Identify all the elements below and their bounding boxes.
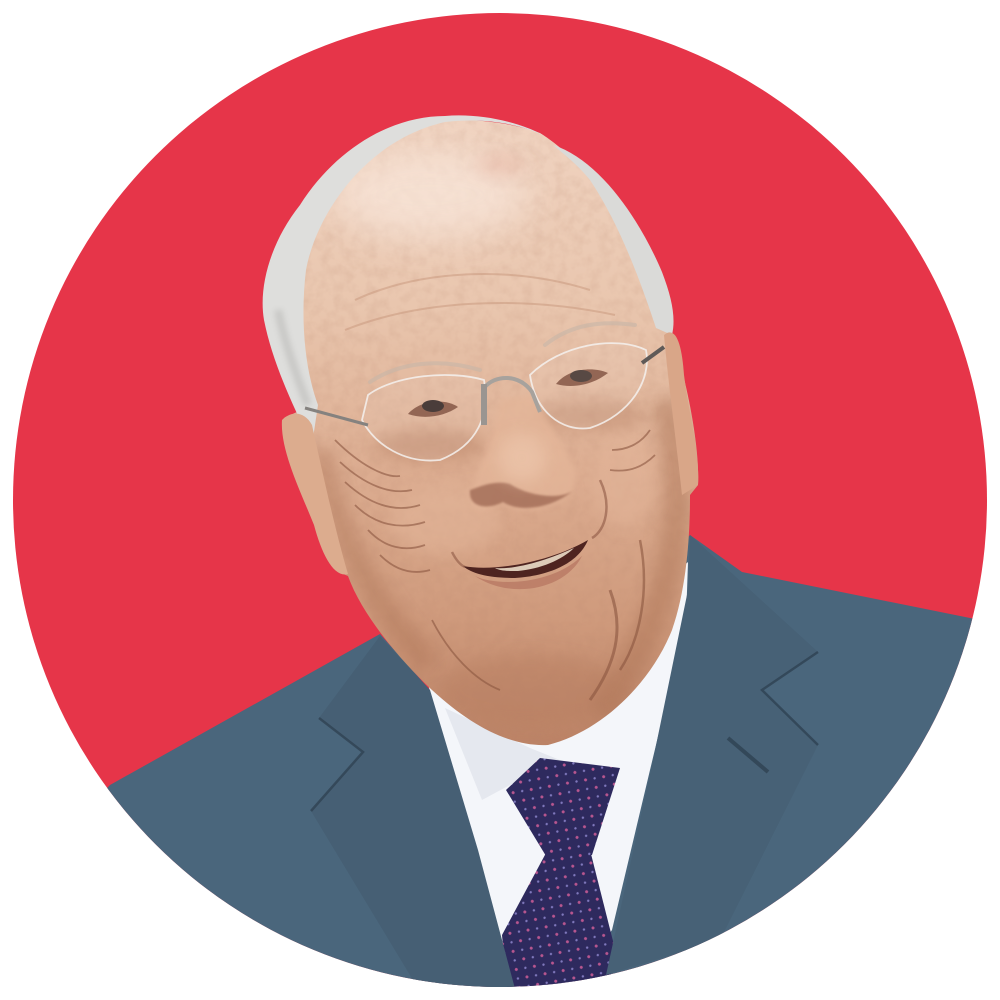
hair shading bbox=[278, 310, 308, 405]
tie knot bbox=[506, 758, 620, 856]
bridge bbox=[484, 378, 540, 412]
left hair bbox=[263, 115, 545, 445]
shirt shadow bbox=[445, 708, 560, 800]
skin bbox=[284, 120, 698, 745]
left lapel bbox=[311, 636, 518, 1000]
lower lip bbox=[475, 556, 582, 589]
eyebrows bbox=[370, 323, 635, 382]
left lens bbox=[362, 375, 485, 461]
glasses bbox=[305, 343, 664, 461]
suit, shirt and tie bbox=[107, 535, 972, 987]
tie blade bbox=[502, 854, 614, 987]
right ear bbox=[664, 332, 698, 495]
shirt collar bbox=[428, 562, 688, 1000]
right lens bbox=[530, 343, 647, 428]
suit jacket bbox=[107, 535, 972, 987]
mouth bbox=[452, 480, 606, 589]
right temple bbox=[642, 347, 664, 363]
smile lines bbox=[452, 480, 606, 567]
face shading bbox=[304, 120, 696, 720]
left ear bbox=[282, 414, 348, 574]
hair bbox=[263, 115, 674, 445]
left temple bbox=[305, 408, 368, 425]
lapel edges bbox=[311, 652, 818, 811]
right hair bbox=[553, 145, 674, 335]
tie bbox=[502, 758, 620, 1000]
head bbox=[263, 110, 710, 760]
teeth bbox=[495, 548, 574, 571]
right eye bbox=[556, 369, 608, 386]
forehead lines bbox=[345, 274, 615, 330]
nose bbox=[469, 395, 576, 510]
left eye bbox=[408, 400, 458, 417]
right lapel bbox=[606, 535, 724, 975]
cheek wrinkles bbox=[335, 430, 655, 700]
